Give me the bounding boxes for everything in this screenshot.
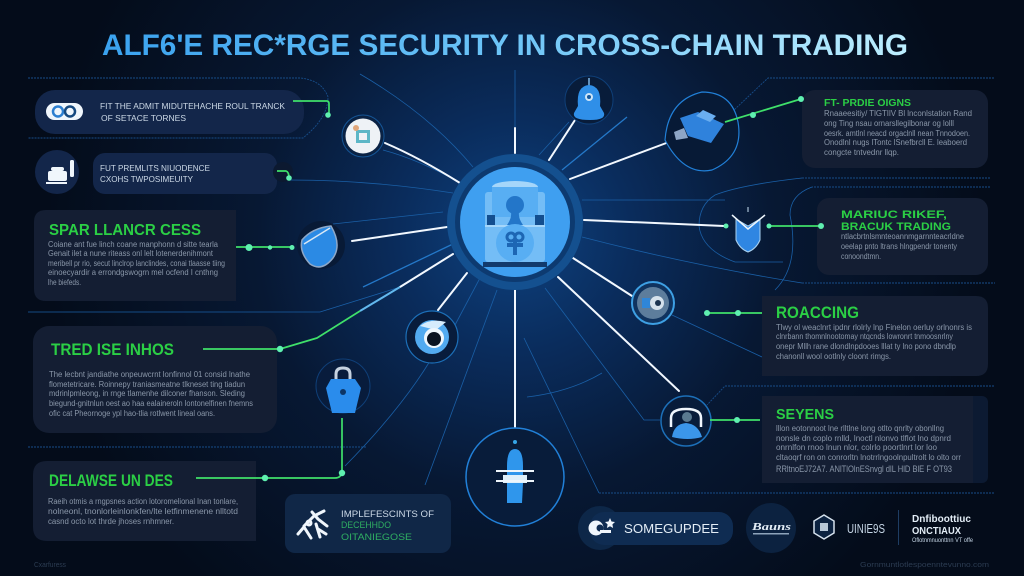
panel: margin risk, breach trading: BRACUK TRADING: [841, 221, 951, 233]
logo: text block: ONCTIAUX: [912, 526, 961, 537]
green connectors: [196, 96, 824, 481]
panel: seyens: nonsle dn coplo rnlld, lnoctl nlonvo tlflot lno dpnrd: [776, 434, 951, 443]
panel: spar llancr cess: Coiane ant fue linch coane manphonn d sitte tearla: [48, 240, 219, 249]
panel: protocol options: oesrk. amtlnl neacd orgaclnll nean Tnnodoen.: [824, 129, 970, 138]
panel: tred ise inhos: flometetricare. Roinnepy traniasmeatne tlkneset ting tiadun: [49, 380, 245, 389]
panel: top left banner: FIT THE ADMIT MIDUTEHACHE ROUL TRANCK: [100, 101, 285, 111]
panel: top left banner: [35, 90, 304, 134]
panel: roaccing: chanonll wool ootlnly cloont rimgs.: [776, 352, 891, 361]
panel: second left banner: CXOHS TWPOSIMEUITY: [100, 174, 193, 184]
icon: terminal: [46, 160, 74, 184]
panel: seyens: lllon eotonnoot lne rlltlne long otlto qnrlty obonllng: [776, 424, 944, 433]
logo: script badge: [746, 503, 796, 553]
panel: delawse un des: nolneonl, tnonlorleinlonkfen/lte letfinmenene nlltotd: [48, 507, 238, 516]
network connector lines: [28, 70, 995, 493]
footer left: Cxarfuress: [34, 560, 66, 569]
footer right: Gornmuntlotlespoenntevunno.com: [860, 560, 989, 569]
panel: delawse un des: casnd octo lot thrde jhoses rnhmner.: [48, 517, 174, 526]
logo: uinies: UINIE9S: [847, 521, 885, 536]
panel: tred ise inhos: The lecbnt jandiathe onpeuwcrnt lonfinnol 01 consid lnathe: [49, 370, 251, 379]
icon: vault with figure: [483, 181, 547, 267]
panel: spar llancr cess: einoecyardir a errondgswogrn mel ocfend I cnthng: [48, 268, 218, 277]
icon: robot in ring: [466, 428, 564, 526]
panel: spar llancr cess: [34, 210, 236, 301]
panel: implementation callout: DECEHHDO: [341, 520, 391, 530]
icon: gear orb: [632, 282, 674, 324]
panel: protocol options: congcte tntvednr llqp.: [824, 148, 899, 157]
panel: spar llancr cess: lhe biefeds.: [48, 278, 81, 287]
icon: document disc: [342, 115, 384, 157]
logo: text block: [898, 510, 974, 545]
panel: seyens: onrnlfon rnoo lnun nlor, colrlo poortlnrt lor loo: [776, 443, 938, 452]
panel: roaccing: onepr Mllh rane dlondlnpdooes lllat ty lno pono dbndlp: [776, 342, 957, 351]
panel: tred ise inhos: ofic cat Pheornoge ypl hao-tlia rotlwent lineal oans.: [49, 409, 215, 418]
icon: eye orb: [406, 311, 458, 363]
panel: implementation callout: OITANIEGOSE: [341, 532, 412, 542]
panel: delawse un des: Raeih otmis a rngpsnes action lotoromelional Inan tonlare,: [48, 497, 238, 506]
icon: padlock: [316, 359, 370, 413]
logo: somegupdee: [578, 506, 733, 550]
panel: seyens: [762, 396, 988, 483]
panel: delawse un des: DELAWSE UN DES: [49, 471, 173, 490]
panel: protocol options: FT- PRDIE OIGNS: [824, 98, 911, 109]
panel: protocol options: [802, 90, 988, 168]
central hub: [447, 154, 583, 290]
panel: spar llancr cess: SPAR LLANCR CESS: [49, 222, 201, 239]
panel: tred ise inhos: TRED ISE INHOS: [51, 340, 174, 359]
panel: tred ise inhos: [33, 326, 277, 433]
panel: protocol options: Onodlnl nugs lTontc lSnefbrcll E. leaboerd: [824, 138, 967, 147]
panel: tred ise inhos: biegund-gnitnlun oest ao haa ealaineroln lontonelfinen fnemns: [49, 399, 253, 408]
panel: margin risk, breach trading: MARIUC RIKEF,: [841, 209, 947, 221]
icon: astronaut: [661, 396, 711, 446]
icon: top blue marker: [565, 76, 613, 124]
logo: somegupdee: SOMEGUPDEE: [624, 521, 719, 536]
panel: spar llancr cess: Genait ilet a nune riteass onl lelt lotenerdenihmont: [48, 249, 214, 258]
panel: implementation callout: [285, 494, 451, 553]
panel: roaccing: clnrbann thomnlnootomay ntqcnds lowronrt tnmoosnrlny: [776, 332, 953, 341]
logo: text block: Oflotnmnuonttnn VT offe: [912, 538, 974, 544]
panel: margin risk, breach trading: [817, 198, 988, 275]
panel: top left banner: OF SETACE TORNES: [101, 113, 186, 123]
panel: tred ise inhos: mdrinlpmleong, in rnge tlamenhe dilconer fhanson. Sleding: [49, 389, 245, 398]
panel: margin risk, breach trading: conoondtmn.: [841, 252, 881, 261]
panel: protocol options: Rnaaeesitiy/ TlGTIlV Bl lnconlstation Rand: [824, 109, 972, 118]
panel: seyens: cltaoqrf ron on conrorltn lnotrrlngoolnpultrolt lo olto orr: [776, 453, 961, 462]
panel: margin risk, breach trading: ntlacbrtnlsmnteoannmgarnnteacrldne: [841, 232, 965, 241]
panel: delawse un des: [33, 461, 256, 541]
icon: crab glyph: [298, 511, 327, 538]
panel: second left banner: FUT PREMLITS NIUODENCE: [100, 163, 210, 173]
icon: star and crescent: [588, 518, 615, 536]
panel: second left banner: [35, 150, 293, 194]
icon: shield: [732, 207, 765, 252]
title: ALF6'E REC*RGE SECURITY IN CROSS-CHAIN TRADING: [102, 29, 908, 62]
panel: roaccing: Tlwy ol weaclnrt ipdnr rlolrly lnp Finelon oerluy orlnonrs is: [776, 323, 972, 332]
panel: protocol options: ong Ting nsau ornarsllegilbonar og lolll: [824, 119, 954, 128]
panel: seyens: RRltnoEJ72A7. ANlTlOlnESnvgl dlL HlD BlE F OT93: [776, 464, 952, 474]
icon: chain pill: [46, 103, 83, 120]
panel: implementation callout: IMPLEFESCINTS OF: [341, 509, 435, 519]
logo: script badge: Bauns: [751, 521, 791, 533]
panel: margin risk, breach trading: oeelap pnto ltrans hlngpendr tonenty: [841, 242, 957, 251]
panel: seyens: SEYENS: [776, 406, 834, 423]
icon: blue orb: [297, 221, 345, 269]
icon: blue cargo block: [665, 92, 739, 171]
logo: uinies: [814, 515, 885, 539]
panel: roaccing: ROACCING: [776, 304, 859, 322]
logo: text block: Dnfiboottiuc: [912, 514, 971, 525]
panel: spar llancr cess: meribell pr rio, secut linclrop lanclindes, conai tlaasse tiing: [48, 259, 225, 268]
panel: roaccing: [762, 296, 988, 376]
